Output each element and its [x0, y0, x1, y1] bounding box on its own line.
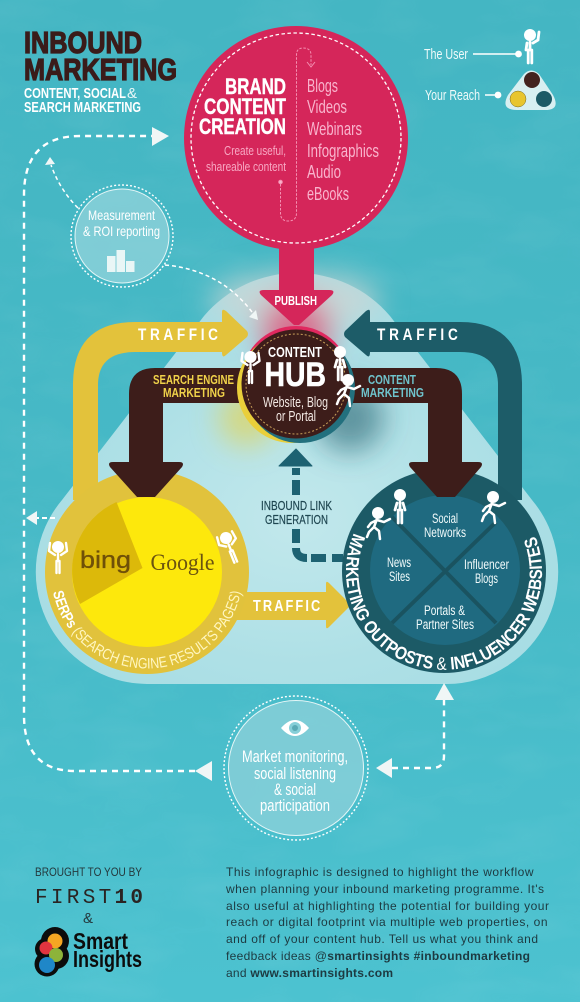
- figure: runner one: [394, 489, 406, 523]
- panel: market monitoring: participation: [260, 796, 330, 815]
- text block: description: reach or digital footprint via multiple web properties, on: [226, 915, 548, 929]
- list: content types: Infographics: [307, 141, 379, 161]
- text block: description: and off of your content hub. Tell us what you think and: [226, 932, 538, 946]
- arrow: brown search engine marketing: SEARCH ENGINE: [153, 373, 234, 387]
- title block: SEARCH MARKETING: [24, 99, 141, 116]
- short arrow from SERPs: [26, 511, 55, 525]
- inner quadrant disc: News: [387, 555, 411, 570]
- curved label: SERPs: SERPs (SEARCH ENGINE RESULTS PAGES): [54, 590, 244, 668]
- arrow: traffic SERPs to outposts: TRAFFIC: [253, 598, 321, 615]
- arrow head: measurement to hub: [249, 310, 258, 320]
- arrow: yellow traffic to hub: [73, 310, 248, 500]
- legend: your reach: Your Reach: [425, 87, 480, 104]
- glow around hub: [211, 272, 384, 452]
- legend: the user: The User: [424, 46, 468, 63]
- arrow: brown content marketing: MARKETING: [361, 386, 424, 400]
- arrow: monitoring to outposts: [376, 683, 454, 778]
- dashed feedback loop arrow: [24, 127, 212, 781]
- pie chart: search engines: [72, 497, 222, 647]
- title block: INBOUND: [24, 25, 142, 60]
- panel: measurement and ROI reporting: Measurement: [88, 207, 155, 223]
- panel: market monitoring: & social: [274, 780, 316, 799]
- credits: [34, 865, 143, 976]
- inner quadrant disc: Social: [432, 511, 458, 526]
- list: content types: [307, 76, 379, 204]
- arrow: publish: PUBLISH: [274, 294, 317, 308]
- panel: SERPs circle: [45, 474, 249, 674]
- heading: brand content creation: [199, 74, 286, 139]
- curved label: outposts: MARKETING OUTPOSTS & INFLUENCER WEBSITES: [346, 534, 542, 670]
- text block: description: and www.smartinsights.com: [226, 966, 393, 980]
- logo: smart insights: [34, 927, 142, 976]
- icon: eye: [281, 720, 309, 736]
- text block: description: feedback ideas @smartinsights #inboundmarketing: [226, 949, 530, 963]
- pie chart: search engines: Google: [150, 550, 214, 575]
- credits: BROUGHT TO YOU BY: [35, 865, 142, 879]
- panel: content hub: or Portal: [276, 408, 316, 425]
- list: content types: Webinars: [307, 119, 362, 139]
- icon: bar chart: [107, 250, 134, 272]
- arrow: dashed inbound link generation: [261, 449, 343, 562]
- arrow: traffic SERPs to outposts: [232, 582, 350, 628]
- central light triangle: [36, 273, 558, 684]
- text block: description: [225, 865, 549, 980]
- arrow: teal traffic to hub: [344, 310, 522, 500]
- figure: runner two: [367, 507, 390, 539]
- panel: measurement and ROI reporting: & ROI reporting: [83, 223, 160, 239]
- text block: description: This infographic is designed to highlight the workflow: [226, 865, 534, 879]
- text block: description: also useful at highlighting the potential for building your: [226, 899, 549, 913]
- heading: brand content creation: CREATION: [199, 114, 286, 139]
- arrow: brown content marketing: [345, 368, 482, 497]
- inner quadrant disc: Partner Sites: [416, 617, 474, 632]
- logo: smart insights: Insights: [73, 946, 142, 972]
- title block: [24, 25, 177, 116]
- panel: brand content creation: [184, 26, 408, 250]
- figure: runner three: [482, 491, 505, 523]
- figure: user right: [215, 529, 244, 565]
- list: content types: Blogs: [307, 76, 338, 96]
- logo: first10: FIRST10: [35, 887, 143, 910]
- arrow: content loop: [279, 48, 315, 221]
- arrow: brown content marketing: CONTENT: [368, 373, 416, 387]
- panel: content hub: CONTENT: [268, 344, 322, 361]
- inner quadrant disc: [370, 495, 520, 645]
- list: content types: eBooks: [307, 184, 349, 204]
- title block: MARKETING: [24, 52, 177, 87]
- panel: marketing outposts circle: [342, 473, 546, 673]
- arrow: brown search engine marketing: MARKETING: [163, 386, 225, 400]
- credits: &: [83, 910, 93, 927]
- panel: content hub: HUB: [264, 356, 326, 394]
- text: create useful: [206, 143, 286, 174]
- figure: hub left: [242, 351, 260, 383]
- panel: market monitoring: social listening: [254, 764, 336, 783]
- list: content types: Audio: [307, 162, 341, 182]
- inner quadrant disc: Sites: [389, 569, 410, 584]
- panel: measurement and ROI reporting: [71, 185, 173, 287]
- inner quadrant disc: Networks: [424, 525, 466, 540]
- panel: market monitoring: Market monitoring,: [242, 747, 348, 766]
- arrow: dashed inbound link generation: GENERATION: [265, 512, 328, 527]
- panel: content hub: Website, Blog: [263, 394, 328, 411]
- heading: brand content creation: CONTENT: [204, 94, 286, 119]
- inner quadrant disc: Influencer: [464, 557, 509, 572]
- figure: hub right low: [337, 374, 360, 406]
- arrow head: measurement to loop: [45, 157, 55, 165]
- panel: content hub: [237, 326, 360, 443]
- arrow: yellow traffic to hub: TRAFFIC: [138, 326, 218, 344]
- title block: CONTENT, SOCIAL: [24, 85, 126, 102]
- arrow: publish: [260, 240, 333, 325]
- arrow: brown search engine marketing: [109, 368, 250, 497]
- legend: [424, 29, 556, 110]
- logo: smart insights: Smart: [73, 928, 128, 954]
- inner quadrant disc: Portals &: [424, 603, 465, 618]
- measurement link arrows: [51, 165, 252, 312]
- text: create useful: Create useful,: [224, 143, 286, 158]
- inner quadrant disc: Blogs: [475, 571, 498, 586]
- text: create useful: shareable content: [206, 159, 286, 174]
- text block: description: when planning your inbound marketing programme. It's: [225, 882, 544, 896]
- heading: brand content creation: BRAND: [225, 74, 286, 99]
- title block: &: [127, 85, 137, 102]
- arrow: teal traffic to hub: TRAFFIC: [377, 326, 458, 344]
- figure: user left: [49, 541, 67, 573]
- panel: market monitoring: [224, 696, 368, 840]
- arrow: dashed inbound link generation: INBOUND LINK: [261, 498, 332, 513]
- figure: hub right top: [334, 346, 346, 380]
- pie chart: search engines: bing: [80, 547, 131, 574]
- list: content types: Videos: [307, 97, 347, 117]
